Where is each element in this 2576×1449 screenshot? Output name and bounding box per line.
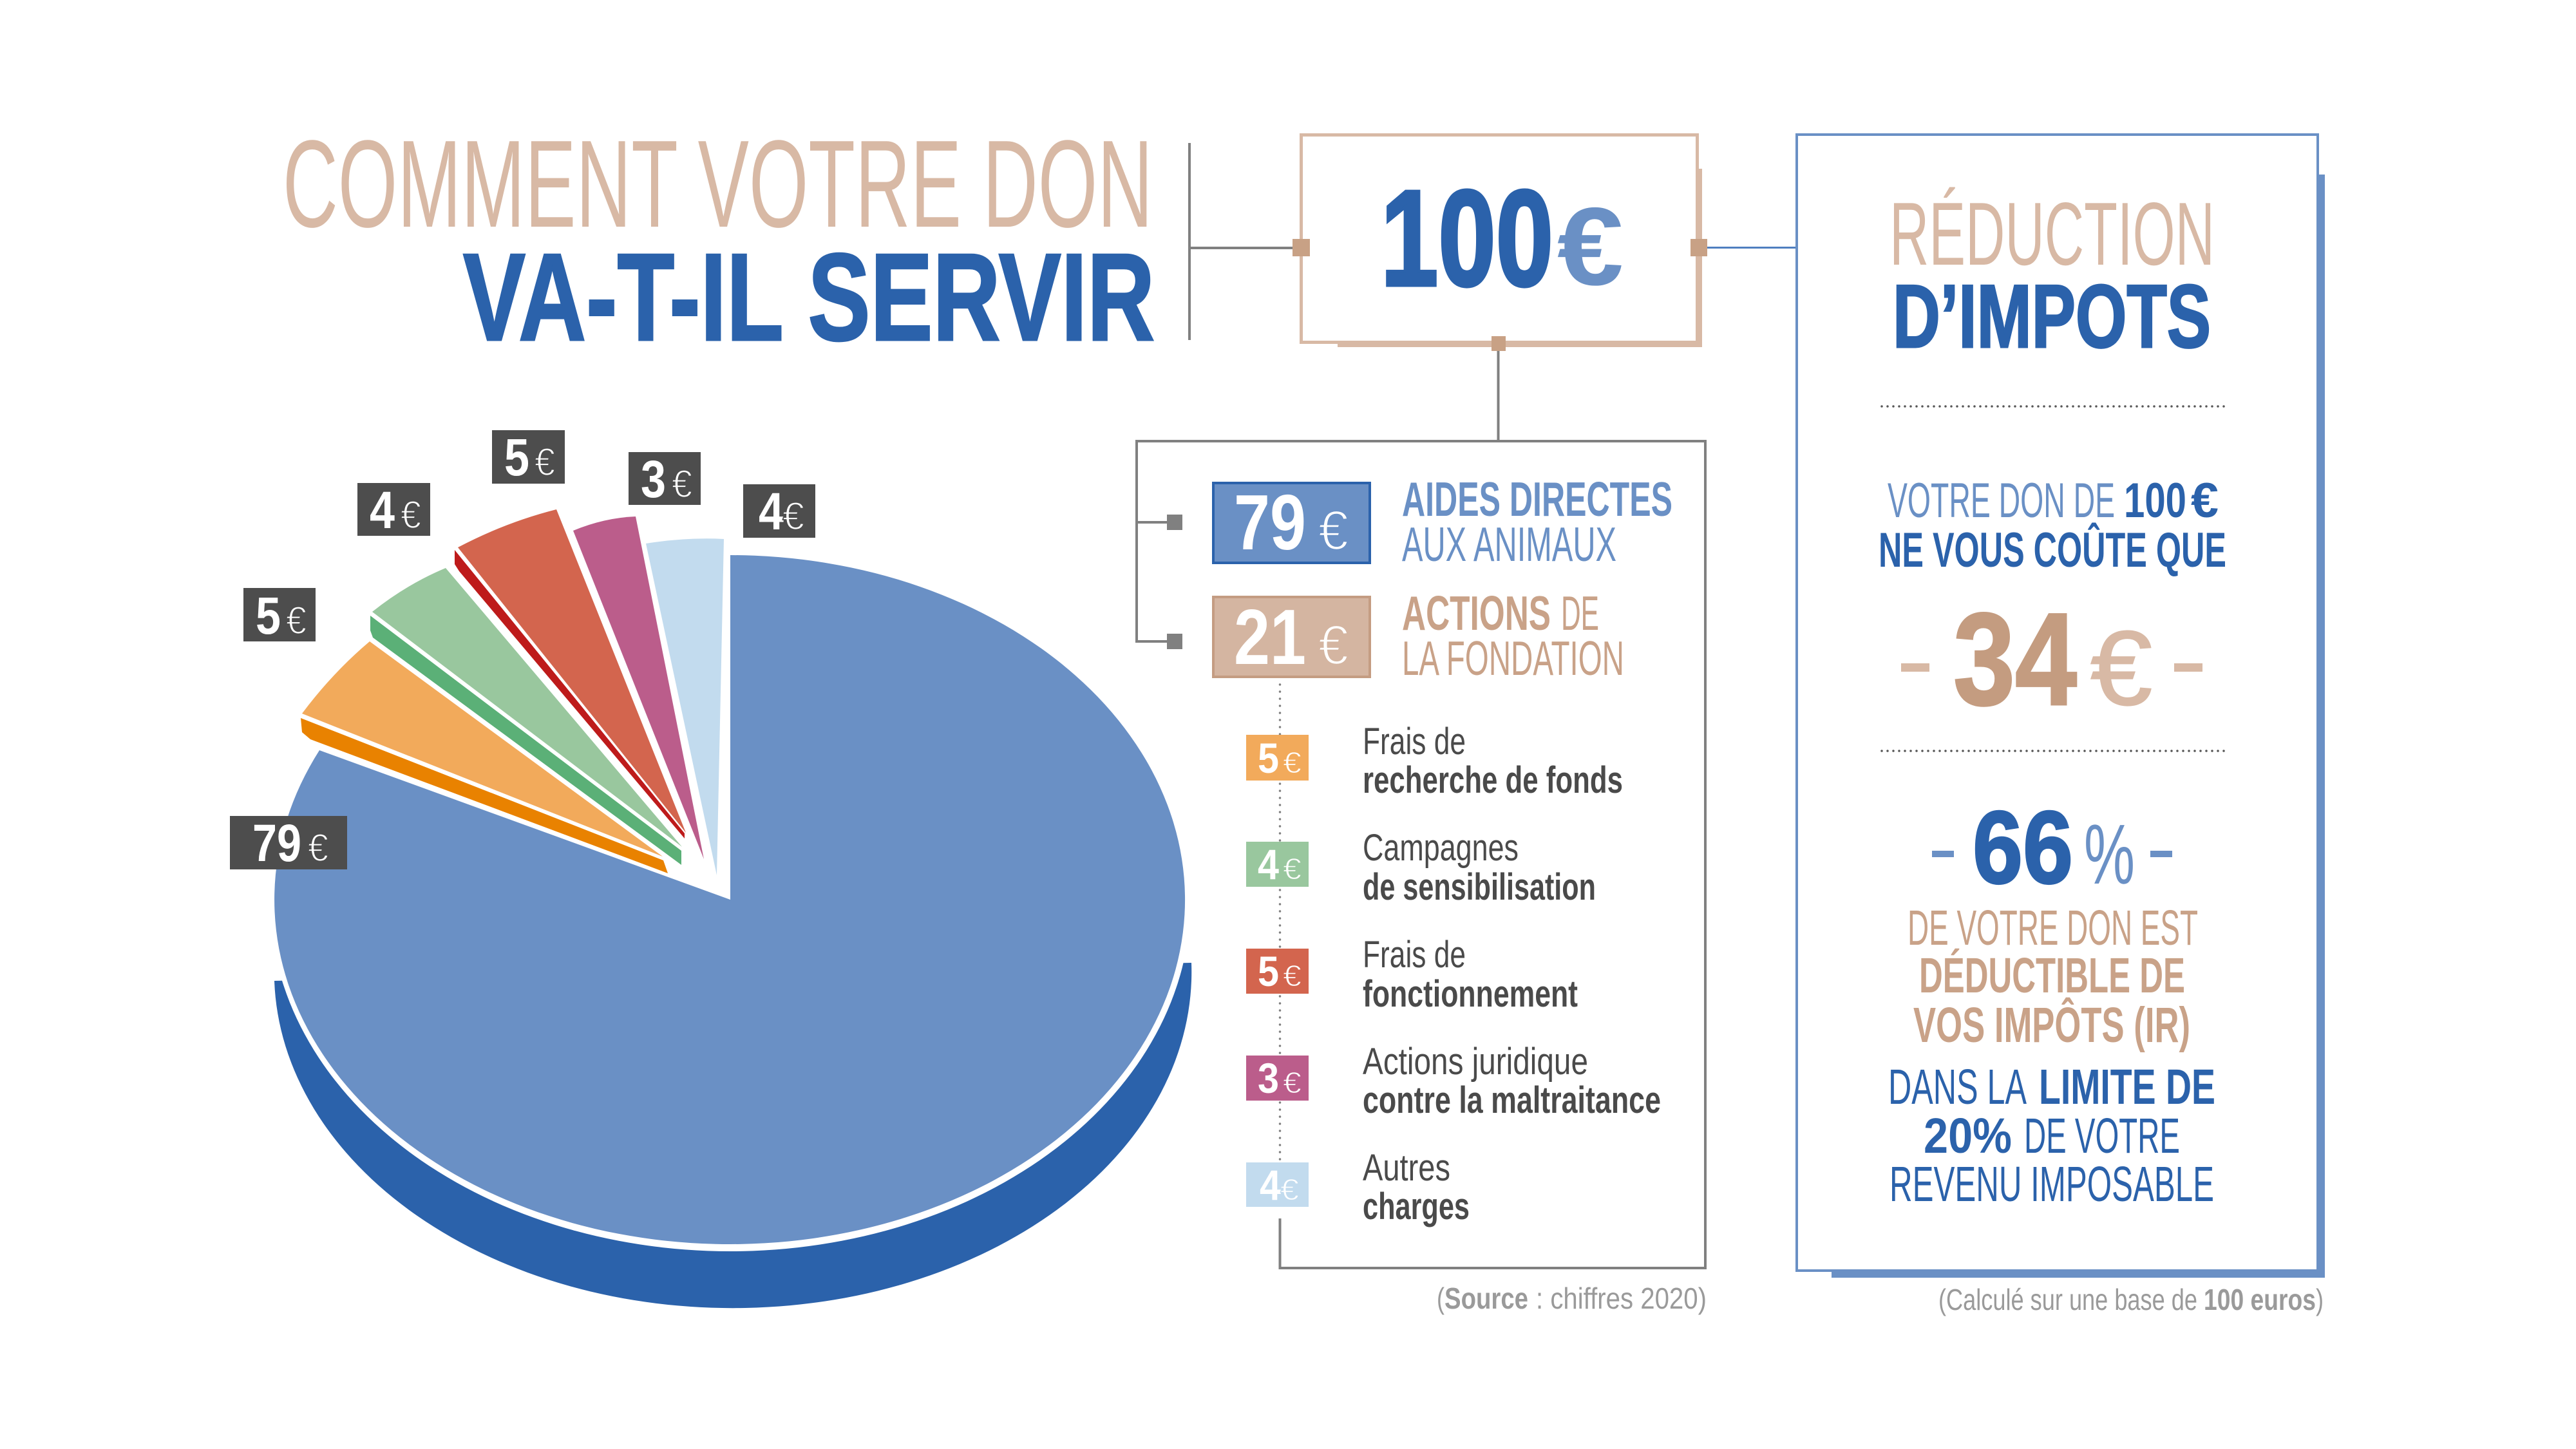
badge: 21 euros: 21 <box>1234 593 1306 681</box>
pie slice: awareness campaigns <box>370 568 682 865</box>
connector: 100 euro box to tax panel <box>1707 247 1797 249</box>
badge: operating: € <box>1283 959 1302 992</box>
calculation note: (Calculé sur une base de <box>1938 1283 2197 1316</box>
source note: : chiffres 2020) <box>1536 1282 1707 1315</box>
pie label: 5 euros fundraising: 5 <box>256 587 281 645</box>
badge: other: 4 <box>1260 1161 1281 1209</box>
pie label: 3 euros legal: € <box>672 462 692 506</box>
bullet: direct aid connector <box>1137 515 1182 530</box>
text: your donation costs only <box>1879 473 2226 578</box>
pie slice: other charges <box>646 538 724 875</box>
text: foundation actions: ACTIONS <box>1402 586 1551 640</box>
pie label: 3 euros legal <box>629 450 701 509</box>
text: your donation costs only: VOTRE DON DE <box>1888 473 2115 528</box>
title: VA-T-IL SERVIR <box>463 227 1155 366</box>
text: foundation actions: LA FONDATION <box>1402 631 1624 685</box>
badge: fundraising <box>1246 734 1309 782</box>
panel: tax reduction <box>1797 135 2325 1278</box>
text: your donation costs only: € <box>2191 473 2219 528</box>
panel: 100 euro box: 100 <box>1381 162 1553 314</box>
badge: 79 euros <box>1213 478 1370 566</box>
text: legal <box>1363 1041 1661 1121</box>
bullet: foundation connector <box>1135 634 1182 649</box>
text: your donation costs only: NE VOUS COÛTE QUE <box>1879 523 2226 578</box>
badge: operating: 5 <box>1258 947 1279 995</box>
text: direct aid <box>1402 472 1672 571</box>
pie slice: operating costs <box>455 509 686 838</box>
figure: 66 percent: % <box>2084 807 2135 902</box>
source note: Source <box>1444 1282 1528 1315</box>
text: campaigns: de sensibilisation <box>1363 866 1596 908</box>
pie label: 79 euros: € <box>308 826 328 869</box>
calculation note: 100 euros <box>2204 1283 2316 1316</box>
pie label: 79 euros: 79 <box>252 814 301 873</box>
pie label: 4 euros other <box>743 482 815 541</box>
text: campaigns: Campagnes <box>1363 827 1519 869</box>
text: legal: Actions juridique <box>1363 1041 1588 1083</box>
connector: 100 euro box to breakdown panel <box>1497 351 1499 440</box>
pie gap: white rim <box>270 549 1191 1251</box>
pie label: 4 euros other: € <box>782 495 804 538</box>
text: direct aid: AUX ANIMAUX <box>1402 517 1616 571</box>
badge: campaigns <box>1246 840 1309 888</box>
text: fundraising: Frais de <box>1363 721 1466 762</box>
pie label: 79 euros <box>230 814 347 873</box>
text: deductible: DÉDUCTIBLE DE <box>1919 948 2185 1003</box>
pie base: dark rim <box>274 963 1191 1308</box>
heading: tax reduction: D’IMPOTS <box>1893 267 2211 366</box>
heading: tax reduction <box>1889 184 2215 366</box>
badge: legal: 3 <box>1258 1054 1279 1102</box>
pie label: 4 euros campaigns <box>357 481 430 540</box>
title: COMMENT VOTRE DON <box>283 114 1153 253</box>
badge: legal: € <box>1283 1066 1302 1099</box>
text: income limit: LIMITE DE <box>2039 1059 2215 1115</box>
text: operating: fonctionnement <box>1363 973 1578 1015</box>
figure: 34 euros: € <box>2090 609 2152 727</box>
connector: title to 100 euro box <box>1189 143 1294 340</box>
badge: fundraising: € <box>1283 746 1302 779</box>
figure: 34 euros: 34 <box>1953 586 2077 733</box>
figure: 34 euros <box>1901 586 2202 733</box>
badge: other: € <box>1280 1173 1299 1206</box>
panel: 100 euro box <box>1293 135 1707 351</box>
text: income limit <box>1888 1059 2215 1212</box>
pie slice: legal actions <box>573 516 704 859</box>
badge: 21 euros: € <box>1318 614 1349 676</box>
badge: campaigns: € <box>1283 852 1302 886</box>
pie label: 3 euros legal: 3 <box>641 450 666 509</box>
panel: 100 euro box: € <box>1557 185 1624 308</box>
pie label: 4 euros other: 4 <box>759 482 784 541</box>
pie label: 5 euros operating <box>492 428 565 487</box>
pie label: 5 euros fundraising <box>243 587 316 645</box>
calculation note: ) <box>2316 1283 2324 1316</box>
text: your donation costs only: 100 <box>2124 473 2186 528</box>
title <box>283 114 1155 366</box>
text: income limit: REVENU IMPOSABLE <box>1889 1157 2214 1212</box>
pie label: 4 euros campaigns: € <box>401 493 421 536</box>
text: other: charges <box>1363 1186 1470 1227</box>
text: foundation actions <box>1402 586 1624 685</box>
heading: tax reduction: RÉDUCTION <box>1889 184 2215 284</box>
badge: operating <box>1246 947 1309 995</box>
text: income limit: DANS LA <box>1888 1059 2027 1115</box>
text: other: Autres <box>1363 1147 1450 1189</box>
figure: 66 percent <box>1932 790 2172 905</box>
pie label: 5 euros fundraising: € <box>286 599 307 642</box>
text: legal: contre la maltraitance <box>1363 1079 1661 1121</box>
text: income limit: 20% <box>1924 1108 2012 1164</box>
text: deductible: DE VOTRE DON EST <box>1908 900 2198 956</box>
badge: 21 euros <box>1213 593 1370 681</box>
text: fundraising: recherche de fonds <box>1363 759 1623 801</box>
text: campaigns <box>1363 827 1596 908</box>
pie label: 4 euros campaigns: 4 <box>370 481 395 540</box>
pie chart <box>270 509 1191 1308</box>
figure: 66 percent: 66 <box>1973 790 2073 905</box>
badge: other <box>1246 1161 1309 1209</box>
badge: 79 euros: 79 <box>1234 478 1306 566</box>
text: deductible <box>1908 900 2198 1053</box>
pie label: 5 euros operating: 5 <box>504 428 529 487</box>
text: direct aid: AIDES DIRECTES <box>1402 472 1672 526</box>
badge: 79 euros: € <box>1318 500 1349 562</box>
text: income limit: DE VOTRE <box>2024 1108 2180 1164</box>
pie label: 5 euros operating: € <box>535 440 555 484</box>
pie slice: 79 euros <box>274 555 1185 1244</box>
pie slice: fundraising <box>301 641 668 873</box>
text: operating: Frais de <box>1363 934 1466 976</box>
text: other <box>1363 1147 1470 1227</box>
text: deductible: VOS IMPÔTS (IR) <box>1913 997 2190 1053</box>
badge: legal <box>1246 1054 1309 1102</box>
text: fundraising <box>1363 721 1623 801</box>
text: foundation actions: DE <box>1561 586 1599 640</box>
badge: fundraising: 5 <box>1258 734 1279 782</box>
source note: ( <box>1437 1282 1445 1315</box>
badge: campaigns: 4 <box>1258 840 1279 888</box>
source note <box>1437 1282 1707 1315</box>
panel: breakdown <box>1135 441 1705 1268</box>
text: operating <box>1363 934 1578 1015</box>
